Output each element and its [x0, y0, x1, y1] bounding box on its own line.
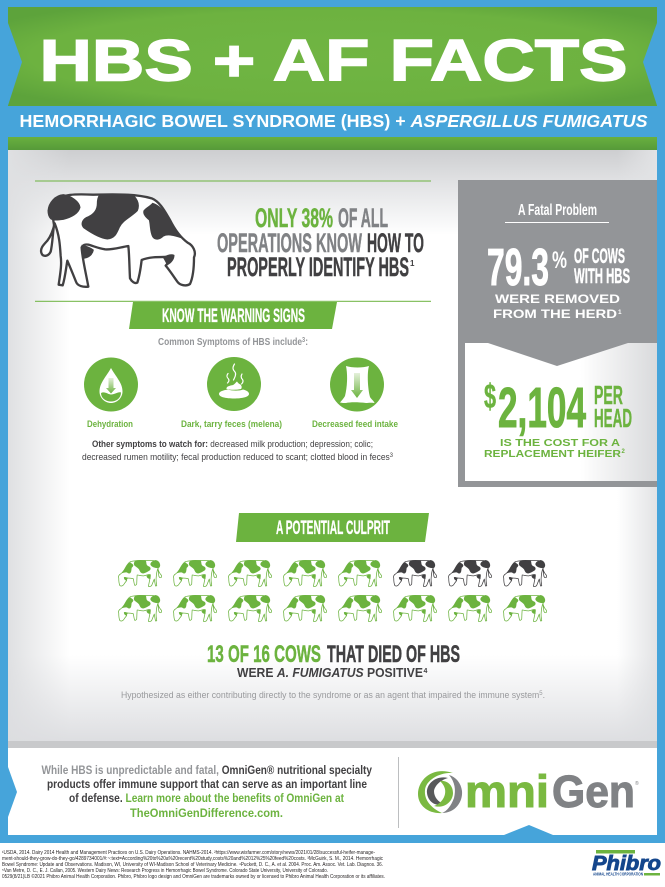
footnotes: ⁵Van Metre, D. C., E. J. Callan, 2005. Western Dairy News: Research Progress in Hemorrhagic Bowel Syndrome. Colorado State University, University of Colorado. [2, 868, 328, 874]
headline: 13 of 16 cows: 4 [424, 668, 428, 675]
headline: only 38%: OPERATIONS KNOW [217, 228, 362, 258]
heading: know the warning signs: KNOW THE WARNING SIGNS [162, 305, 305, 327]
stat: 79.3%: 79.3 [487, 239, 549, 297]
footer text: products offer immune support that can serve as an important line [47, 779, 367, 791]
footnotes [2, 850, 385, 880]
text: other symptoms: decreased rumen motility; fecal production reduced to scant; clotted blood in feces [82, 452, 428, 463]
logo: OmniGen: Gen [552, 766, 635, 817]
text: common symptoms: Common Symptoms of HBS include [158, 336, 338, 348]
logo: OmniGen: ® [635, 780, 639, 787]
headline: only 38%: PROPERLY IDENTIFY HBS [227, 252, 409, 282]
headline: 13 of 16 cows [207, 641, 460, 680]
footnotes: ment-should-they-grow-do-they-go/4289734001/#:~:text=According%20to%20a%20recent%20study,costs%20and%2012%25%20feed%20costs. ³McGuirk, S. M., 2014. Hemorrhagic [2, 856, 383, 862]
symptom labels [87, 419, 398, 430]
headline: only 38%: HOW TO [367, 228, 424, 258]
logo: OmniGen [418, 766, 639, 817]
footer text: TheOmniGenDifference.com. [130, 808, 283, 820]
headline: only 38% [217, 203, 424, 282]
panel: replacement cost: PER [594, 380, 623, 410]
panel: replacement cost [465, 343, 657, 481]
headline: 13 of 16 cows: THAT DIED OF HBS [327, 641, 460, 668]
headline: 13 of 16 cows: WERE A. FUMIGATUS POSITIVE [237, 666, 423, 680]
panel: replacement cost: $ [484, 378, 496, 416]
panel: replacement cost: IS THE COST FOR A [500, 437, 620, 449]
panel heading: A Fatal Problem [518, 202, 597, 219]
footnotes: ¹USDA, 2014. Dairy 2014 Health and Management Practices on U.S. Dairy Operations. NAHMS-2014. ²https://www.wisfarmer.com/story/news/2021/01/28/successful-heifer-manage- [2, 850, 375, 856]
symptom labels: Dark, tarry feces (melena) [181, 419, 282, 430]
stat: 79.3%: % [552, 247, 567, 274]
panel: a fatal problem [458, 180, 657, 487]
text: hypothesis: 5 [539, 690, 543, 697]
footnotes: Bowel Syndrome: Update and Observations. Madison, WI, University of WI-Madison School of Veterinary Medicine. ⁴Puckett, D. C., A. et al. 2004. Proc. Am. Assoc. Vet. Lab. Diagnos. 36. [2, 862, 383, 868]
text: other symptoms: Other symptoms to watch for: decreased milk production; depression; colic; [92, 439, 373, 450]
stat: 79.3%: 1 [618, 309, 622, 316]
text: common symptoms: : [305, 336, 308, 348]
heading: a potential culprit: A POTENTIAL CULPRIT [276, 517, 390, 539]
symptom labels: Decreased feed intake [312, 419, 398, 430]
footer text: of defense. Learn more about the benefits of OmniGen at [69, 793, 344, 805]
panel: replacement cost: 2,104 [498, 376, 586, 440]
stat: 79.3%: FROM THE HERD [493, 309, 617, 321]
text: hypothesis: Hypothesized as either contributing directly to the syndrome or as an agent that impaired the immune system [121, 690, 579, 701]
icon: dark tarry feces [207, 357, 261, 411]
stat: 79.3% [487, 239, 630, 321]
footer text [42, 765, 373, 820]
icon: dehydration [84, 358, 138, 412]
panel: replacement cost: 2 [622, 449, 626, 455]
icon: large cow [41, 194, 195, 287]
headline: only 38%: 1 [410, 259, 415, 268]
footer text: While HBS is unpredictable and fatal, OmniGen® nutritional specialty [42, 765, 373, 777]
text: hypothesis: . [543, 690, 545, 701]
headline: 13 of 16 cows: 13 OF 16 COWS [207, 641, 321, 668]
symptom labels: Dehydration [87, 419, 133, 430]
heading: know the warning signs [129, 302, 337, 329]
headline: only 38%: ONLY 38% [255, 203, 333, 233]
heading: a potential culprit [236, 513, 429, 542]
stat: 79.3%: WERE REMOVED [495, 294, 620, 306]
footnotes: 0529(8/21)LB ©2021 Phibro Animal Health Corporation. Phibro, Phibro logo design and OmniGen are trademarks owned by or licensed to Phibro Animal Health Corporation or its affiliates. [2, 873, 385, 880]
panel: footer [8, 748, 657, 835]
logo: Phibro: ANIMAL HEALTH CORPORATION [593, 872, 643, 876]
title: HBS + AF FACTS [40, 28, 628, 94]
green strip under subtitle [8, 137, 657, 150]
divider lines [35, 180, 431, 302]
text: common symptoms: 3 [302, 337, 305, 344]
logo: Phibro: Phibro [592, 853, 661, 875]
text: other symptoms [82, 439, 393, 463]
pictogram: 16 cows [119, 560, 547, 621]
headline: only 38%: OF ALL [338, 203, 388, 233]
icon: decreased feed intake [330, 358, 384, 412]
logo: OmniGen: mni [465, 766, 549, 817]
subtitle: HEMORRHAGIC BOWEL SYNDROME (HBS) + ASPERGILLUS FUMIGATUS [20, 111, 648, 131]
title banner [8, 7, 657, 106]
main content background [8, 150, 657, 748]
panel: replacement cost: REPLACEMENT HEIFER [484, 448, 621, 460]
text: other symptoms: 3 [390, 452, 393, 459]
